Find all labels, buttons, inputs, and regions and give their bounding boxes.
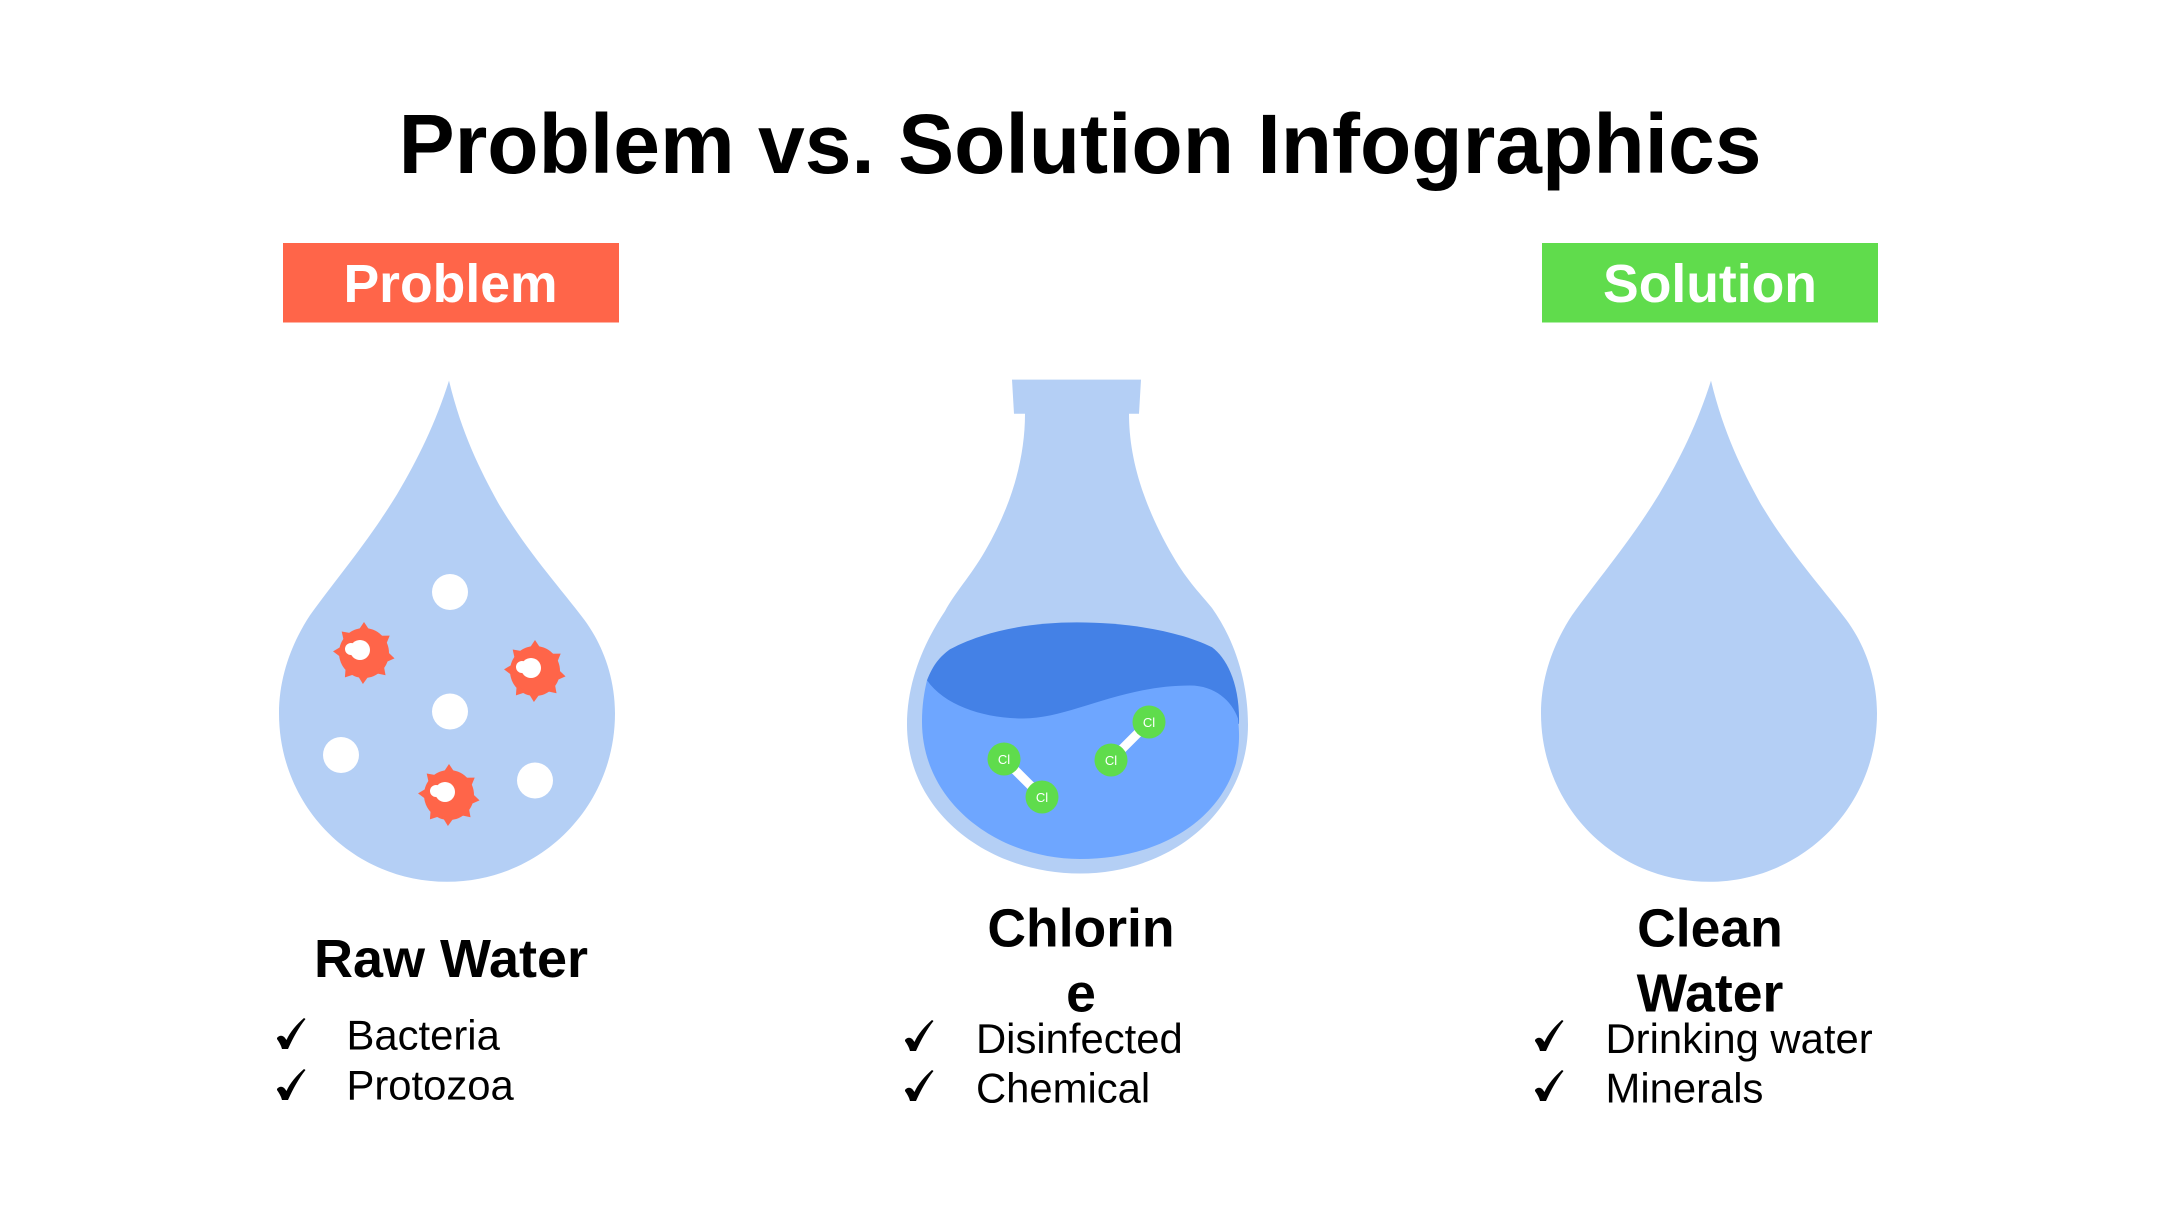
heading: chlorine: Chlorin [987, 900, 1175, 958]
list: raw water [277, 1012, 515, 1108]
heading: chlorine [987, 900, 1175, 1024]
molecule: Cl2 right [1094, 706, 1166, 776]
heading: clean water: Water [1637, 964, 1784, 1024]
molecule: Cl2 left [988, 742, 1058, 814]
heading: chlorine: e [1066, 964, 1096, 1024]
panel: problem [277, 243, 619, 1108]
panel: solution [1535, 243, 1878, 1112]
heading: clean water [1637, 900, 1784, 1024]
molecule: Cl2 left: Cl [998, 752, 1010, 767]
icon: clean water drop [1541, 381, 1877, 882]
list: clean water: Minerals [1606, 1064, 1763, 1112]
title: Problem vs. Solution Infographics [399, 97, 1761, 191]
molecule: Cl2 right: Cl [1105, 753, 1117, 768]
problem banner: Problem [343, 255, 558, 314]
panel: chlorine [905, 380, 1248, 1112]
list: clean water: Drinking water [1606, 1015, 1873, 1062]
list: clean water [1535, 1015, 1873, 1112]
list: raw water: Protozoa [346, 1062, 515, 1108]
heading: raw water: Raw Water [314, 929, 588, 989]
icon: chlorine flask [907, 380, 1248, 874]
solution banner [1542, 243, 1878, 322]
icon: raw water drop [279, 381, 615, 882]
list: chlorine: Disinfected [976, 1015, 1183, 1062]
heading: clean water: Clean [1637, 900, 1783, 958]
molecule: Cl2 left: Cl [1036, 790, 1048, 805]
solution banner: Solution [1603, 255, 1817, 314]
molecule: Cl2 right: Cl [1143, 715, 1155, 730]
list: chlorine: Chemical [976, 1064, 1150, 1112]
list: chlorine [905, 1015, 1183, 1112]
list: raw water: Bacteria [346, 1012, 501, 1058]
problem banner [283, 243, 619, 322]
